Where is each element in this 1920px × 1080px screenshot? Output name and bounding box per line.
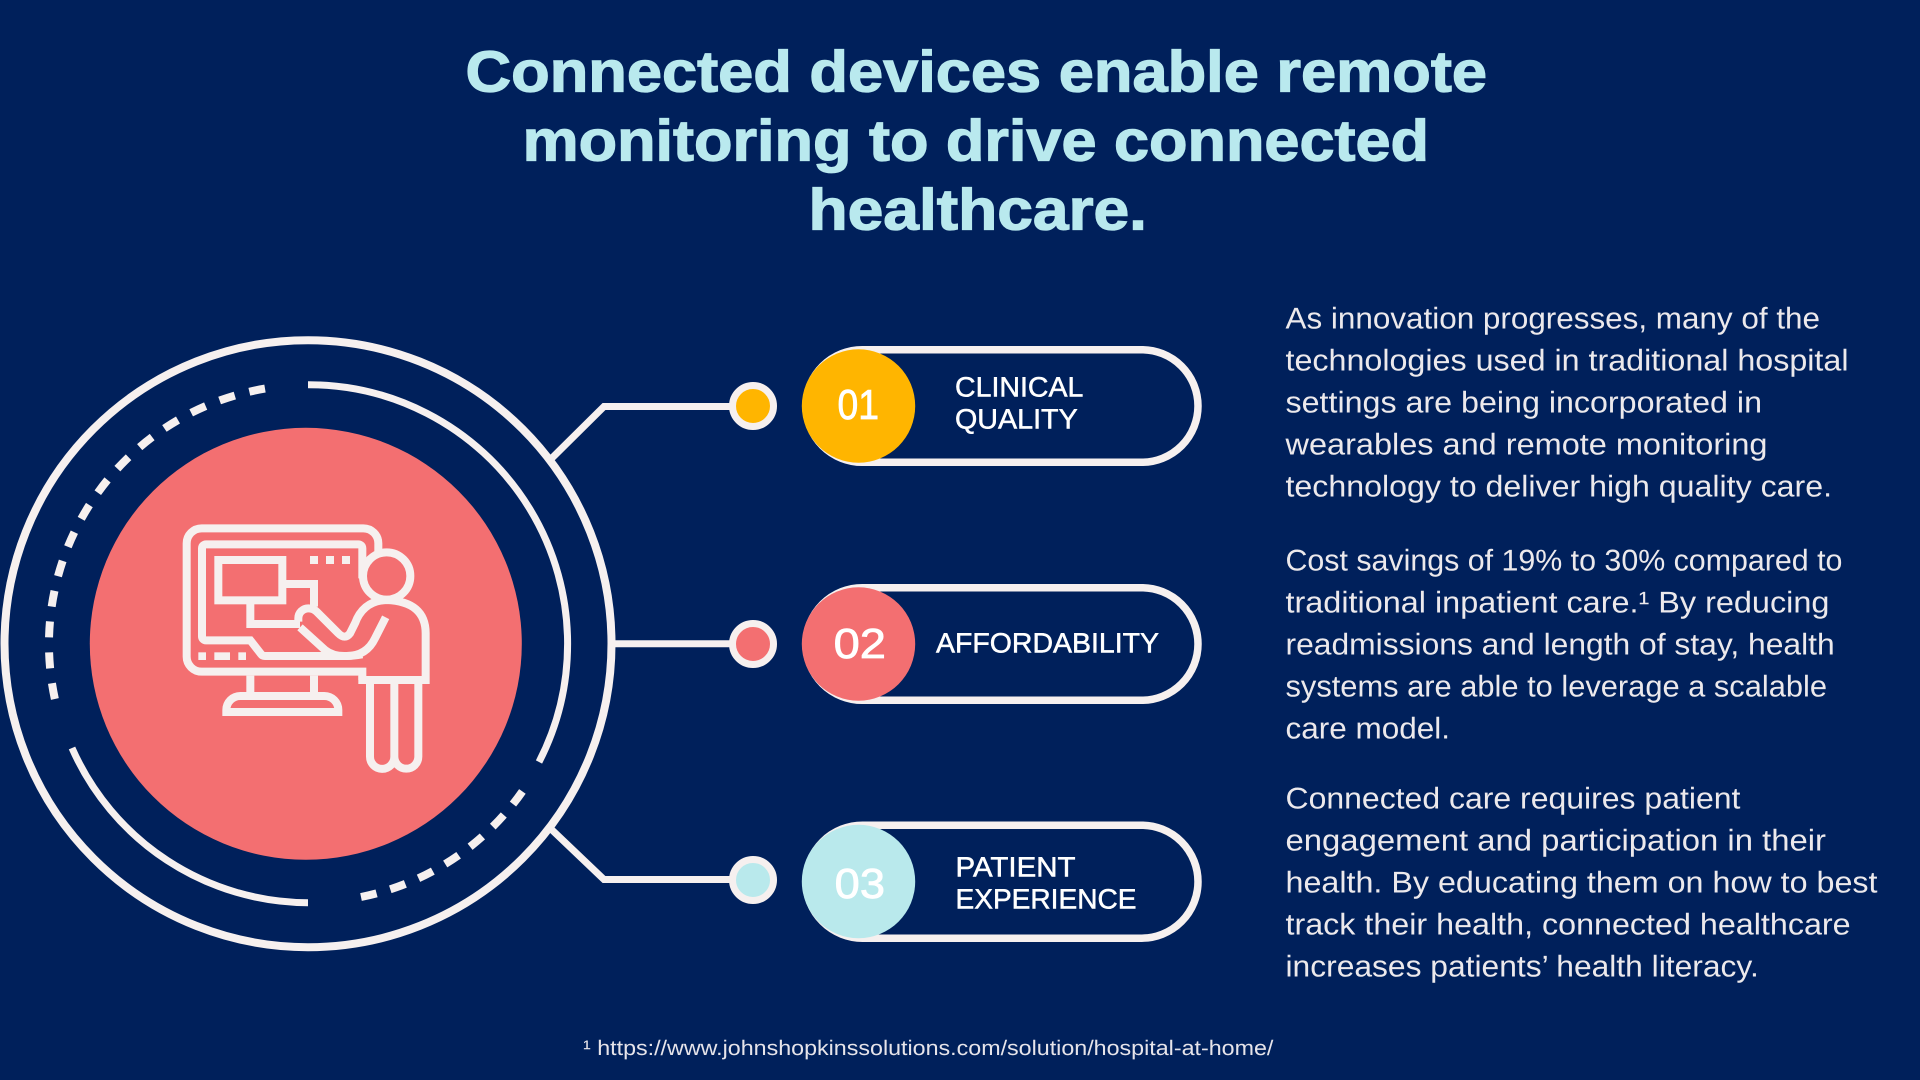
text block: patient engagement: health. By educating them on how to best [1286, 867, 1878, 900]
number 03: 03 [835, 860, 885, 907]
text block: innovation: wearables and remote monitoring [1284, 429, 1768, 462]
text block: innovation [1284, 303, 1848, 504]
text block: innovation: settings are being incorporated in [1286, 387, 1762, 420]
text block: cost savings: Cost savings of 19% to 30% compared to [1286, 544, 1842, 578]
icon: person presenting at monitor [187, 528, 426, 769]
number badge 02 [802, 587, 915, 701]
outer ring [4, 340, 612, 947]
text block: cost savings: readmissions and length of stay, health [1286, 628, 1835, 662]
pill outline 03 [806, 825, 1198, 938]
dashed arc: bottom right [361, 791, 522, 897]
node dot 02 [732, 624, 774, 664]
text block: cost savings [1286, 544, 1842, 746]
pill outline 02 [806, 588, 1198, 700]
text block: innovation: technology to deliver high quality care. [1286, 471, 1832, 504]
title: monitoring to drive connected [523, 108, 1429, 174]
title: healthcare. [808, 178, 1147, 242]
connector lines [551, 406, 735, 880]
label 01 [955, 372, 1083, 435]
label 03: PATIENT [956, 852, 1076, 883]
text block: cost savings: care model. [1286, 712, 1450, 746]
title: Connected devices enable remote [466, 40, 1487, 104]
text block: patient engagement: increases patients’ health literacy. [1286, 951, 1759, 984]
inner solid arc: top to right [308, 385, 568, 762]
node dot 01 [732, 386, 774, 426]
label 02: AFFORDABILITY [936, 628, 1159, 658]
label 03 [956, 852, 1136, 915]
item 01: clinical quality [732, 349, 1198, 463]
text block: patient engagement: Connected care requires patient [1286, 783, 1741, 816]
pill outline 01 [806, 350, 1198, 462]
number 01: 01 [838, 381, 879, 428]
inner solid arc: left to bottom [72, 748, 308, 903]
central coral circle [90, 428, 522, 860]
text block: cost savings: traditional inpatient care.¹ By reducing [1286, 586, 1829, 620]
item 02: affordability [732, 587, 1198, 701]
number badge 01 [802, 349, 915, 463]
number 02: 02 [834, 620, 886, 667]
number badge 03 [802, 825, 915, 938]
text block: patient engagement: track their health, connected healthcare [1286, 909, 1851, 942]
text block: patient engagement [1286, 783, 1878, 984]
label 03: EXPERIENCE [956, 884, 1136, 915]
label 01: CLINICAL [955, 372, 1083, 403]
text block: cost savings: systems are able to leverage a scalable [1286, 670, 1827, 704]
text block: innovation: technologies used in traditional hospital [1286, 345, 1848, 378]
text block: patient engagement: engagement and participation in their [1286, 825, 1826, 858]
item 03: patient experience [732, 825, 1198, 938]
diagram: concentric rings with central icon [4, 340, 612, 947]
footnote: ¹ https://www.johnshopkinssolutions.com/solution/hospital-at-home/ [583, 1037, 1274, 1060]
title [466, 40, 1487, 242]
text block: innovation: As innovation progresses, many of the [1286, 303, 1820, 336]
dashed arc: top left [49, 389, 265, 700]
label 01: QUALITY [955, 404, 1078, 435]
node dot 03 [732, 860, 774, 900]
